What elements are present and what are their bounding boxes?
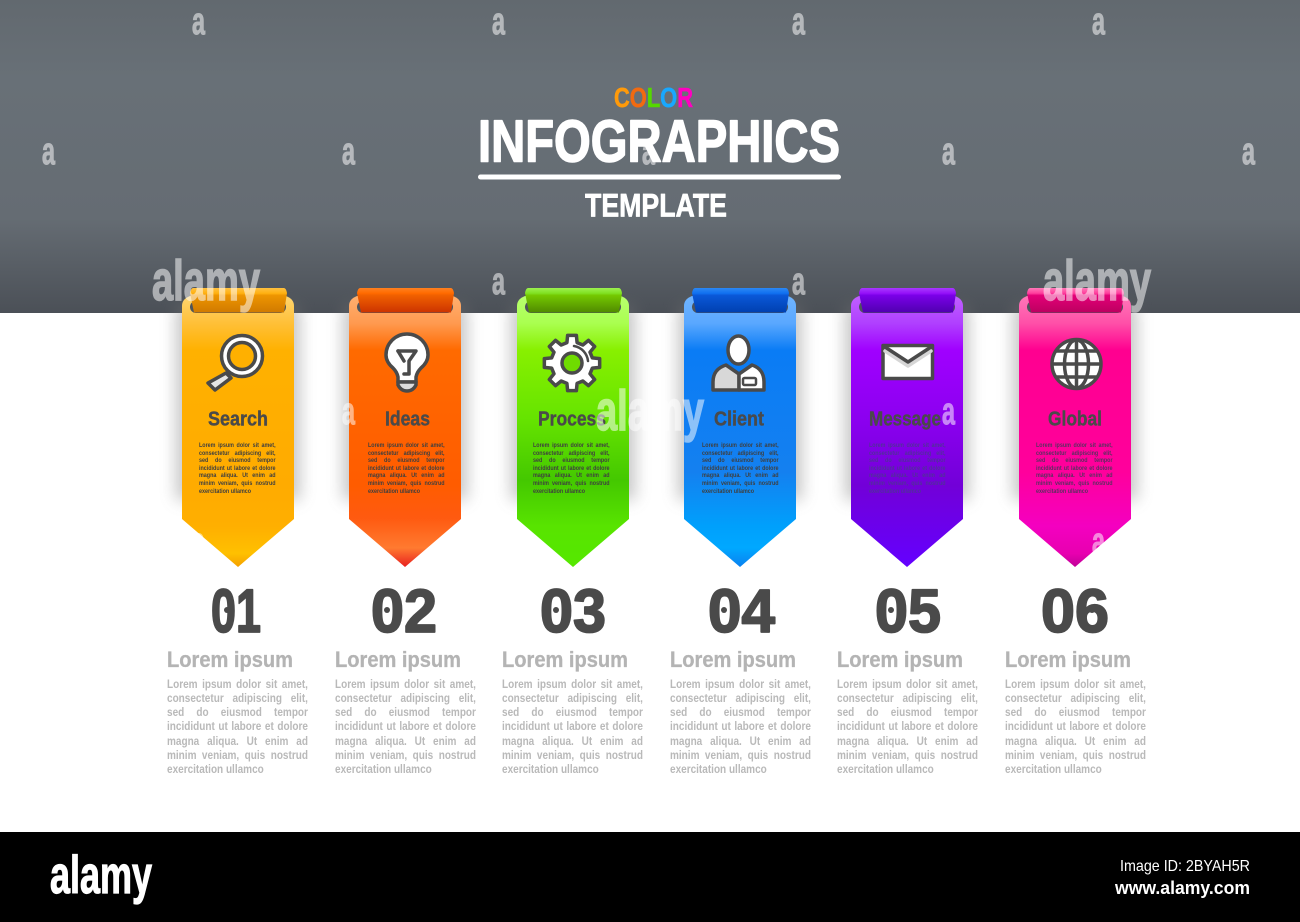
text block: Process: consectetur adipiscing elit, bbox=[533, 450, 610, 457]
text block: Client: incididunt ut labore et dolore bbox=[702, 465, 779, 472]
text block: Message: consectetur adipiscing elit, bbox=[869, 450, 946, 457]
text block: Process: magna aliqua. Ut enim ad bbox=[533, 472, 610, 479]
text block: Ideas: magna aliqua. Ut enim ad bbox=[368, 472, 445, 479]
description: sed do eiusmod tempor bbox=[1005, 707, 1146, 719]
label: Ideas: Ideas bbox=[385, 408, 430, 430]
description: consectetur adipiscing elit, bbox=[502, 693, 643, 705]
heading: Lorem ipsum bbox=[167, 647, 293, 672]
label: Process: Process bbox=[538, 408, 606, 430]
description: magna aliqua. Ut enim ad bbox=[837, 736, 978, 748]
text block: Global: exercitation ullamco bbox=[1036, 488, 1088, 495]
text block: Ideas: sed do eiusmod tempor bbox=[368, 457, 445, 464]
label: Search: Search bbox=[208, 408, 268, 430]
description bbox=[1005, 678, 1146, 780]
text block: Client: sed do eiusmod tempor bbox=[702, 457, 779, 464]
description: sed do eiusmod tempor bbox=[837, 707, 978, 719]
text block: Search: magna aliqua. Ut enim ad bbox=[199, 472, 276, 479]
panel: ribbon 1 Search bbox=[176, 288, 300, 567]
description: minim veniam, quis nostrud bbox=[167, 750, 308, 762]
description: Lorem ipsum dolor sit amet, bbox=[1005, 678, 1146, 690]
website: www.alamy.com bbox=[1114, 878, 1250, 898]
description: magna aliqua. Ut enim ad bbox=[335, 736, 476, 748]
number 03: 03 bbox=[540, 577, 606, 645]
text block: Client: minim veniam, quis nostrud bbox=[702, 480, 779, 487]
text block: Client: magna aliqua. Ut enim ad bbox=[702, 472, 779, 479]
text block: Ideas: incididunt ut labore et dolore bbox=[368, 465, 445, 472]
text block: Message: exercitation ullamco bbox=[869, 488, 921, 495]
title: TEMPLATE: TEMPLATE bbox=[585, 188, 727, 224]
text block: Message: incididunt ut labore et dolore bbox=[869, 465, 946, 472]
description: sed do eiusmod tempor bbox=[502, 707, 643, 719]
icon: globe bbox=[1052, 340, 1101, 388]
watermarks: alamy bbox=[1043, 249, 1151, 313]
number 06: 06 bbox=[1041, 577, 1109, 645]
title block bbox=[478, 82, 841, 224]
description: sed do eiusmod tempor bbox=[335, 707, 476, 719]
description: exercitation ullamco bbox=[837, 764, 934, 776]
text block: Client: consectetur adipiscing elit, bbox=[702, 450, 779, 457]
watermarks: a bbox=[792, 261, 806, 303]
text block: Process: exercitation ullamco bbox=[533, 488, 585, 495]
description: minim veniam, quis nostrud bbox=[335, 750, 476, 762]
description bbox=[670, 678, 811, 780]
text block: Process: sed do eiusmod tempor bbox=[533, 457, 610, 464]
watermarks: a bbox=[42, 131, 56, 173]
text block: Global bbox=[1036, 442, 1113, 498]
text block: Client: exercitation ullamco bbox=[702, 488, 754, 495]
heading: Lorem ipsum bbox=[670, 647, 796, 672]
watermarks: a bbox=[492, 1, 506, 43]
description: exercitation ullamco bbox=[1005, 764, 1102, 776]
watermarks bbox=[42, 1, 1256, 563]
description: sed do eiusmod tempor bbox=[167, 707, 308, 719]
description: consectetur adipiscing elit, bbox=[837, 693, 978, 705]
text block: Global: magna aliqua. Ut enim ad bbox=[1036, 472, 1113, 479]
description: incididunt ut labore et dolore bbox=[502, 721, 643, 733]
description bbox=[335, 678, 476, 780]
text block: Message bbox=[869, 442, 946, 498]
text block: Message: sed do eiusmod tempor bbox=[869, 457, 946, 464]
label: Global: Global bbox=[1048, 408, 1102, 430]
column 6 text bbox=[1005, 577, 1146, 780]
watermarks: a bbox=[192, 521, 206, 563]
number 04: 04 bbox=[708, 577, 775, 645]
text block: Search bbox=[199, 442, 276, 498]
text block: Search: exercitation ullamco bbox=[199, 488, 251, 495]
number 02: 02 bbox=[371, 577, 437, 645]
text block: Search: sed do eiusmod tempor bbox=[199, 457, 276, 464]
description: magna aliqua. Ut enim ad bbox=[167, 736, 308, 748]
title: COLOR: COLOR bbox=[614, 82, 693, 113]
watermarks: a bbox=[792, 1, 806, 43]
text block: Message: Lorem ipsum dolor sit amet, bbox=[869, 442, 946, 449]
text block: Process: minim veniam, quis nostrud bbox=[533, 480, 610, 487]
column 1 text bbox=[167, 577, 308, 780]
panel: ribbon 6 Global bbox=[1013, 288, 1137, 567]
watermarks: alamy bbox=[152, 249, 260, 313]
watermarks: a bbox=[342, 391, 356, 433]
icon: envelope bbox=[883, 346, 932, 378]
title: INFOGRAPHICS: INFOGRAPHICS bbox=[478, 108, 840, 174]
label: Message: Message bbox=[869, 408, 941, 430]
watermarks: alamy bbox=[596, 379, 704, 443]
description: Lorem ipsum dolor sit amet, bbox=[670, 678, 811, 690]
text block: Global: consectetur adipiscing elit, bbox=[1036, 450, 1113, 457]
description: exercitation ullamco bbox=[502, 764, 599, 776]
description: exercitation ullamco bbox=[167, 764, 264, 776]
column 2 text bbox=[335, 577, 476, 780]
column 4 text bbox=[670, 577, 811, 780]
text block: Ideas: consectetur adipiscing elit, bbox=[368, 450, 445, 457]
title underline bbox=[478, 174, 841, 180]
heading: Lorem ipsum bbox=[502, 647, 628, 672]
description bbox=[167, 678, 308, 780]
label: Client: Client bbox=[714, 408, 764, 430]
description: Lorem ipsum dolor sit amet, bbox=[167, 678, 308, 690]
text block: Global: incididunt ut labore et dolore bbox=[1036, 465, 1113, 472]
panel: ribbon 3 Process bbox=[511, 288, 635, 567]
description: incididunt ut labore et dolore bbox=[670, 721, 811, 733]
text block: Message: minim veniam, quis nostrud bbox=[869, 480, 946, 487]
text block: Client bbox=[702, 442, 779, 498]
watermarks: a bbox=[942, 391, 956, 433]
footer bar bbox=[0, 832, 1300, 922]
watermarks: a bbox=[1092, 1, 1106, 43]
watermarks: a bbox=[942, 131, 956, 173]
panel: ribbon 5 Message bbox=[845, 288, 969, 567]
description bbox=[837, 678, 978, 780]
description: Lorem ipsum dolor sit amet, bbox=[502, 678, 643, 690]
watermarks: a bbox=[642, 131, 656, 173]
text block: Search: incididunt ut labore et dolore bbox=[199, 465, 276, 472]
heading: Lorem ipsum bbox=[335, 647, 461, 672]
text block: Message: magna aliqua. Ut enim ad bbox=[869, 472, 946, 479]
description: magna aliqua. Ut enim ad bbox=[1005, 736, 1146, 748]
text block: Process: Lorem ipsum dolor sit amet, bbox=[533, 442, 610, 449]
description: incididunt ut labore et dolore bbox=[167, 721, 308, 733]
heading: Lorem ipsum bbox=[837, 647, 963, 672]
text block: Search: Lorem ipsum dolor sit amet, bbox=[199, 442, 276, 449]
description: minim veniam, quis nostrud bbox=[1005, 750, 1146, 762]
description: consectetur adipiscing elit, bbox=[670, 693, 811, 705]
text block: Global: Lorem ipsum dolor sit amet, bbox=[1036, 442, 1113, 449]
description: incididunt ut labore et dolore bbox=[1005, 721, 1146, 733]
description bbox=[502, 678, 643, 780]
text block: Ideas: exercitation ullamco bbox=[368, 488, 420, 495]
text block: Search: consectetur adipiscing elit, bbox=[199, 450, 276, 457]
text block: Ideas: Lorem ipsum dolor sit amet, bbox=[368, 442, 445, 449]
watermarks: a bbox=[1092, 521, 1106, 563]
description: Lorem ipsum dolor sit amet, bbox=[335, 678, 476, 690]
number 01: 01 bbox=[211, 577, 261, 645]
column 5 text bbox=[837, 577, 978, 780]
text block: Search: minim veniam, quis nostrud bbox=[199, 480, 276, 487]
footer logo: alamy bbox=[50, 846, 152, 905]
header band bbox=[0, 0, 1300, 313]
icon: gear bbox=[544, 335, 600, 391]
description: consectetur adipiscing elit, bbox=[1005, 693, 1146, 705]
text block: Process: incididunt ut labore et dolore bbox=[533, 465, 610, 472]
panel: ribbon 2 Ideas bbox=[343, 288, 467, 567]
image id: Image ID: 2BYAH5R bbox=[1120, 858, 1250, 875]
text block: Client: Lorem ipsum dolor sit amet, bbox=[702, 442, 779, 449]
description: consectetur adipiscing elit, bbox=[335, 693, 476, 705]
description: consectetur adipiscing elit, bbox=[167, 693, 308, 705]
description: minim veniam, quis nostrud bbox=[502, 750, 643, 762]
text block: Process bbox=[533, 442, 610, 498]
text block: Ideas: minim veniam, quis nostrud bbox=[368, 480, 445, 487]
icon: magnifier bbox=[208, 336, 262, 390]
description: incididunt ut labore et dolore bbox=[837, 721, 978, 733]
heading: Lorem ipsum bbox=[1005, 647, 1131, 672]
icon: light bulb bbox=[386, 334, 428, 391]
column 3 text bbox=[502, 577, 643, 780]
description: magna aliqua. Ut enim ad bbox=[502, 736, 643, 748]
watermarks: a bbox=[492, 261, 506, 303]
watermarks: a bbox=[192, 1, 206, 43]
description: exercitation ullamco bbox=[335, 764, 432, 776]
text block: Global: minim veniam, quis nostrud bbox=[1036, 480, 1113, 487]
description: incididunt ut labore et dolore bbox=[335, 721, 476, 733]
description: minim veniam, quis nostrud bbox=[670, 750, 811, 762]
watermarks: a bbox=[1242, 131, 1256, 173]
description: Lorem ipsum dolor sit amet, bbox=[837, 678, 978, 690]
text block: Global: sed do eiusmod tempor bbox=[1036, 457, 1113, 464]
description: minim veniam, quis nostrud bbox=[837, 750, 978, 762]
panel: ribbon 4 Client bbox=[678, 288, 802, 567]
description: magna aliqua. Ut enim ad bbox=[670, 736, 811, 748]
watermarks: a bbox=[342, 131, 356, 173]
text block: Ideas bbox=[368, 442, 445, 498]
description: sed do eiusmod tempor bbox=[670, 707, 811, 719]
icon: client bbox=[713, 336, 764, 390]
number 05: 05 bbox=[875, 577, 941, 645]
description: exercitation ullamco bbox=[670, 764, 767, 776]
